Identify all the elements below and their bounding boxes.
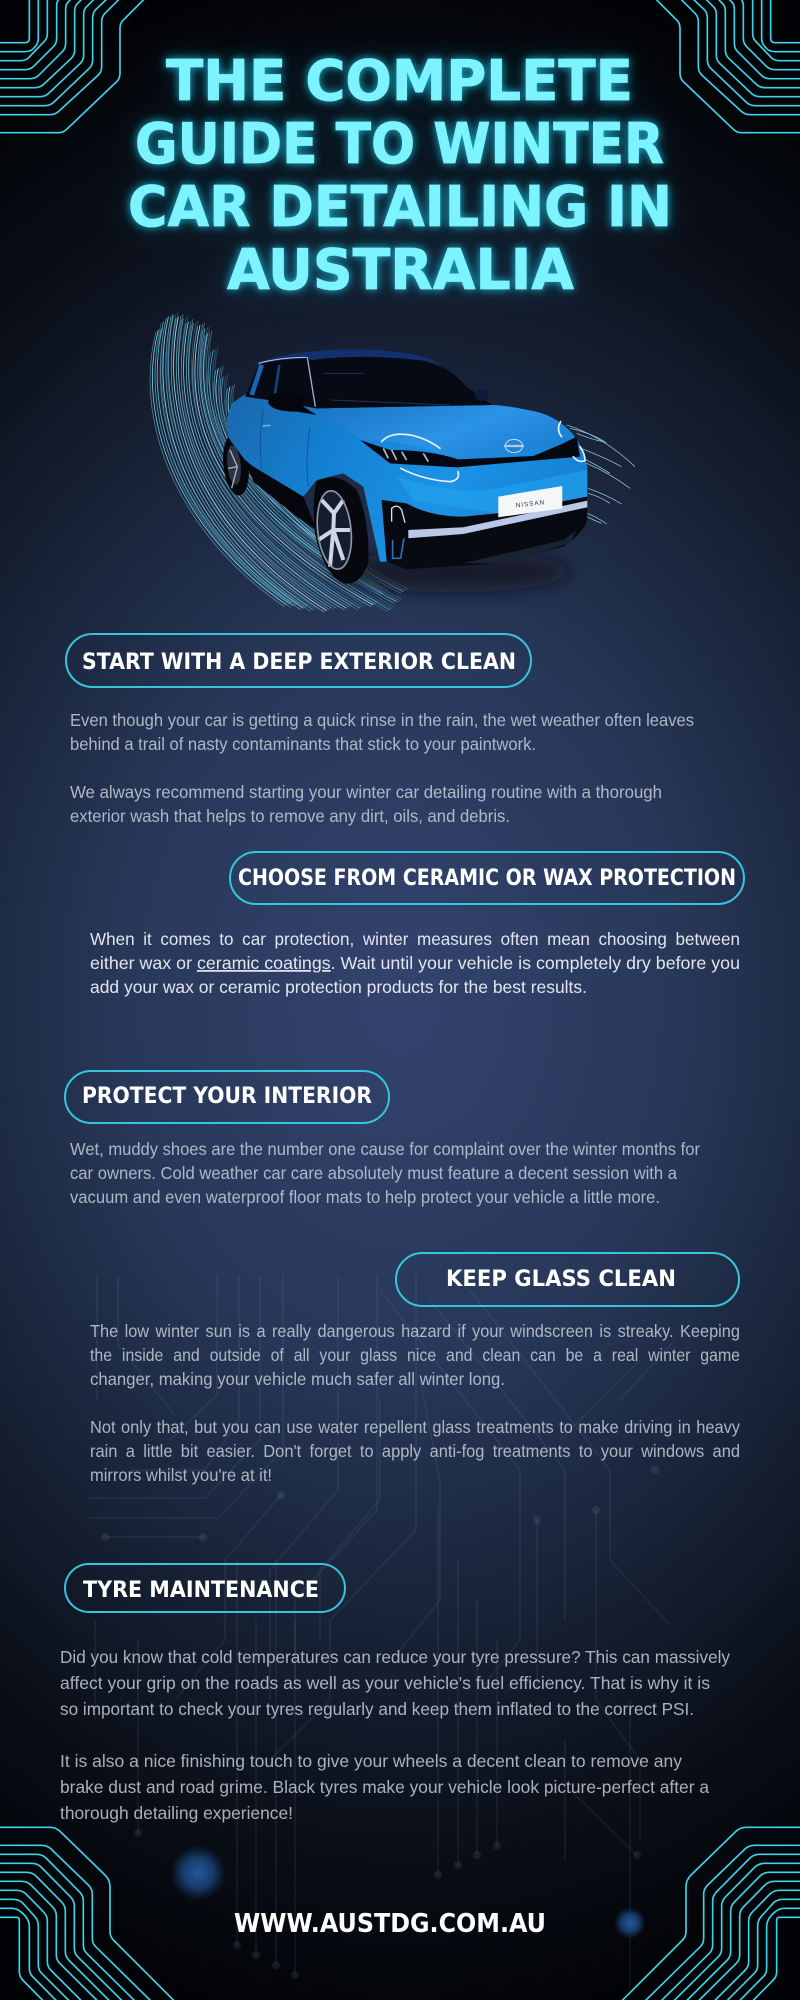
circuit corner bottom-right: [619, 1827, 800, 2000]
body text: The low winter sun is a really dangerous hazard if your windscreen is streaky. Keeping: [90, 1321, 740, 1341]
right streak lines: [567, 425, 635, 524]
far mirror: [475, 389, 488, 401]
heading pill: [65, 1564, 345, 1612]
headlight detail: [383, 448, 428, 462]
car side and front body: [227, 393, 587, 562]
body text: Even though your car is getting a quick rinse in the rain, the wet weather often leaves: [70, 710, 694, 730]
fog vents: [392, 506, 405, 558]
website footer: WWW.AUSTDG.COM.AU: [234, 1909, 546, 1939]
chrome bar: [408, 501, 587, 538]
body text: rain a little bit easier. Don't forget to apply anti-fog treatments to your windows and: [90, 1441, 740, 1461]
headlight band: [360, 437, 580, 467]
section: ceramic or wax: [90, 852, 744, 997]
title: GUIDE TO WINTER: [135, 112, 664, 177]
side mirror: [268, 392, 317, 415]
heading pill: PROTECT YOUR INTERIOR: [82, 1084, 372, 1109]
circuit corner bottom-left: [0, 1827, 177, 2000]
side skirt: [245, 460, 317, 530]
body text: [70, 710, 694, 826]
body text: so important to check your tyres regularly and keep them inflated to the correct PSI.: [60, 1699, 694, 1719]
body text: [70, 1139, 700, 1207]
windows and windscreen: [245, 357, 492, 408]
body text: Not only that, but you can use water repellent glass treatments to make driving in heavy: [90, 1417, 740, 1437]
body text: Wet, muddy shoes are the number one cause for complaint over the winter months for: [70, 1139, 700, 1159]
section: keep glass clean: [90, 1253, 740, 1485]
lower front grille: [382, 497, 587, 569]
title: [128, 49, 672, 303]
light swoosh lines: [150, 312, 408, 612]
door line and handle: [260, 410, 310, 487]
ground shadow: [330, 551, 570, 592]
body text: brake dust and road grime. Black tyres make your vehicle look picture-perfect after a: [60, 1777, 709, 1797]
section: tyre maintenance: [60, 1564, 730, 1823]
plate: [498, 486, 562, 517]
heading pill: [65, 1071, 389, 1123]
blue glow right: [614, 1907, 646, 1939]
LED strips: [382, 422, 585, 482]
pillars: [252, 357, 450, 407]
heading pill: [396, 1253, 739, 1306]
body text: Did you know that cold temperatures can reduce your tyre pressure? This can massively: [60, 1647, 730, 1667]
car illustration: [150, 312, 635, 612]
title: THE COMPLETE: [166, 49, 633, 114]
body text: exterior wash that helps to remove any dirt, oils, and debris.: [70, 806, 510, 826]
heading pill: KEEP GLASS CLEAN: [446, 1267, 676, 1292]
body text: behind a trail of nasty contaminants that stick to your paintwork.: [70, 734, 536, 754]
body text: changer, making your vehicle much safer all winter long.: [90, 1369, 505, 1389]
roof: [255, 350, 468, 387]
chin grey: [463, 530, 577, 563]
circuit corner top-left: [0, 0, 145, 133]
heading pill: START WITH A DEEP EXTERIOR CLEAN: [82, 650, 516, 675]
body text: mirrors whilst you're at it!: [90, 1465, 272, 1485]
front bumper highlight: [397, 470, 587, 513]
section: protect your interior: [65, 1071, 700, 1207]
rear wheel: [220, 433, 252, 497]
body text: It is also a nice finishing touch to give your wheels a decent clean to remove any: [60, 1751, 682, 1771]
body text: We always recommend starting your winter car detailing routine with a thorough: [70, 782, 662, 802]
hood: [317, 406, 571, 463]
body text: thorough detailing experience!: [60, 1803, 293, 1823]
background circuit pattern: [87, 1275, 675, 1990]
heading pill: [230, 852, 744, 904]
body text: vacuum and even waterproof floor mats to help protect your vehicle a little more.: [70, 1187, 660, 1207]
body text: When it comes to car protection, winter measures often mean choosing between: [90, 929, 740, 949]
front wheel: [314, 477, 368, 584]
heading pill: [66, 634, 531, 687]
heading pill: TYRE MAINTENANCE: [83, 1578, 319, 1603]
body text: car owners. Cold weather car care absolutely must feature a decent session with a: [70, 1163, 677, 1183]
title: CAR DETAILING IN: [128, 175, 672, 240]
title: AUSTRALIA: [227, 238, 575, 303]
Nissan badge: [504, 439, 524, 453]
body text: [60, 1647, 730, 1823]
body text: [90, 929, 740, 997]
circuit corner top-right: [655, 0, 800, 133]
section: start with a deep exterior clean: [66, 634, 694, 826]
plate: NISSAN: [515, 499, 546, 509]
body text: [90, 1321, 740, 1485]
body text: the inside and outside of all your glass nice and clean can be a real winter game: [90, 1345, 740, 1365]
body text: either wax or ceramic coatings. Wait until your vehicle is completely dry before you: [90, 953, 740, 973]
blue glow left: [170, 1845, 226, 1901]
body text: affect your grip on the roads as well as your vehicle's fuel efficiency. That is why it is: [60, 1673, 710, 1693]
heading pill: CHOOSE FROM CERAMIC OR WAX PROTECTION: [238, 866, 736, 891]
body text: add your wax or ceramic protection products for the best results.: [90, 977, 587, 997]
